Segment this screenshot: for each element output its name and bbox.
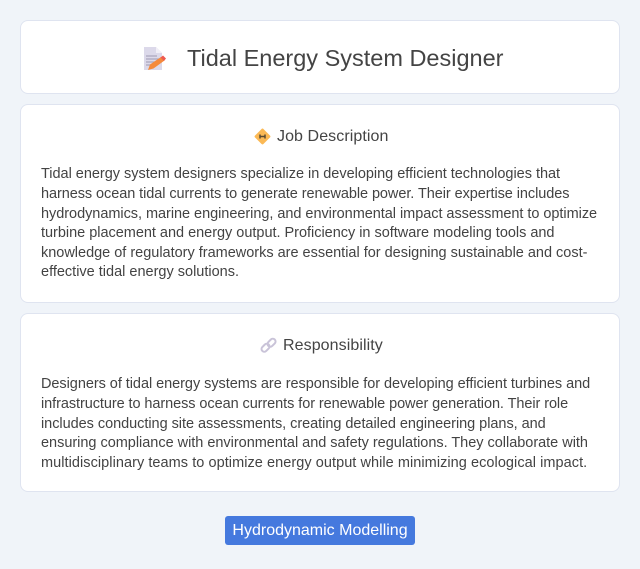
text block: job description: turbine placement and energy output. Proficiency in software modeling tools and (41, 225, 554, 241)
tag: hydrodynamic modelling (225, 516, 415, 545)
text block: job description: Tidal energy system designers specialize in developing efficient technologies that (41, 166, 560, 182)
text block: responsibility: includes conducting site assessments, creating detailed engineering plans, and (41, 416, 546, 432)
icon: chain link (260, 338, 276, 353)
tag: hydrodynamic modelling: Hydrodynamic Modelling (232, 522, 408, 539)
text block: responsibility: ensuring compliance with environmental and safety regulations. They collaborate with (41, 435, 588, 451)
panel: title card (20, 20, 620, 94)
text block: job description: effective tidal energy solutions. (41, 264, 239, 280)
icon: document with pencil (144, 47, 166, 70)
panel: job description (20, 104, 620, 303)
text block: responsibility (41, 376, 590, 471)
text block: job description: knowledge of regulatory frameworks are essential for designing sustainable and cost- (41, 245, 587, 261)
text block: job description: harness ocean tidal currents to generate renewable power. Their expertise includes (41, 186, 569, 202)
text block: responsibility: infrastructure to harness ocean currents for renewable power generation. Their role (41, 396, 568, 412)
text block: responsibility: Designers of tidal energy systems are responsible for developing efficient turbines and (41, 376, 590, 392)
title: Tidal Energy System Designer (187, 45, 504, 71)
icon: road sign (254, 128, 270, 144)
panel: responsibility (20, 313, 620, 492)
text block: job description (41, 166, 597, 280)
text block: job description: hydrodynamics, marine engineering, and environmental impact assessment to optimize (41, 206, 597, 222)
text block: responsibility: multidisciplinary teams to optimize energy output while minimizing ecological impact. (41, 455, 587, 471)
heading: responsibility: Responsibility (283, 337, 383, 354)
heading: job description: Job Description (277, 128, 388, 145)
